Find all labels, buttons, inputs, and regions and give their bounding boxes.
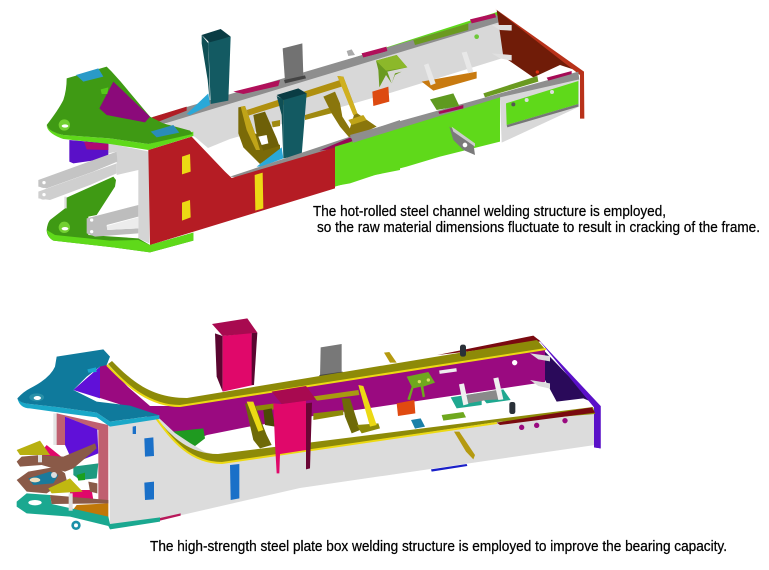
upper lug arms bbox=[38, 152, 117, 200]
upper clevis plate bbox=[47, 67, 193, 150]
near flange yellow edge bbox=[156, 418, 497, 463]
green gusset bbox=[173, 428, 205, 447]
box beam web bbox=[100, 349, 545, 442]
dark red near strip bbox=[497, 407, 595, 425]
diagonal lug bbox=[384, 352, 397, 363]
black pin near bbox=[509, 402, 515, 414]
purple rear strip redraw bbox=[594, 406, 601, 448]
purple inner plate bbox=[69, 140, 108, 163]
far flange yellow edge bbox=[107, 349, 546, 406]
holes bbox=[519, 418, 568, 430]
caption: steel plate box structure: The high-strength steel plate box welding structure is employed to improve the bearing capacity. bbox=[150, 538, 727, 555]
rear end plate bbox=[495, 9, 584, 119]
near flange bbox=[350, 72, 579, 143]
green bracket bbox=[376, 55, 407, 87]
interior frame bbox=[53, 413, 108, 518]
grey bracket bbox=[283, 43, 306, 83]
yellow patches bbox=[182, 154, 263, 221]
pink post rear bbox=[212, 318, 257, 392]
red web bbox=[148, 137, 335, 245]
blue patches bbox=[133, 426, 239, 500]
diagonal yellow lug bbox=[454, 432, 475, 459]
rear end plate bbox=[538, 339, 601, 448]
top teal plate bbox=[17, 349, 159, 427]
lower clevis plate bbox=[47, 177, 193, 252]
orange plate bbox=[372, 87, 389, 106]
fins bbox=[439, 353, 550, 389]
dark red far strip bbox=[437, 336, 541, 355]
olive and magenta strips bbox=[362, 13, 572, 114]
near pink post bbox=[272, 386, 316, 473]
green pad bbox=[442, 412, 466, 421]
far side green web panel placeholder bbox=[335, 127, 400, 187]
caption: hot-rolled structure: The hot-rolled steel channel welding structure is employed, bbox=[313, 203, 666, 220]
lower lug arms bbox=[87, 205, 138, 237]
far rail and web bbox=[153, 12, 503, 148]
yoke assembly bbox=[238, 76, 377, 164]
near teal post bbox=[257, 88, 307, 167]
near web bbox=[109, 408, 595, 528]
orange base bracket bbox=[422, 52, 477, 91]
orange plate bbox=[397, 400, 415, 416]
black pin bbox=[460, 345, 466, 357]
lug stack bbox=[17, 441, 108, 511]
grey inner end web bbox=[108, 143, 149, 243]
green bracket bbox=[407, 372, 435, 400]
magenta strip bbox=[319, 138, 355, 151]
lower teal plate bbox=[17, 493, 181, 530]
cyan pad bbox=[411, 418, 425, 429]
diagram: high-strength steel plate box frame bbox=[17, 318, 601, 530]
far bracket bbox=[319, 344, 343, 379]
green near web bbox=[335, 97, 500, 186]
bracket white ribs and base bbox=[451, 377, 511, 408]
caption: hot-rolled structure bbox=[313, 203, 760, 236]
far rail wear strips bbox=[152, 47, 387, 122]
near olive flange bbox=[155, 407, 595, 463]
diagram: hot-rolled steel channel frame bbox=[38, 9, 584, 252]
far olive flange bbox=[108, 340, 545, 406]
grey box reinforcement bbox=[500, 79, 579, 143]
blue strip bbox=[431, 464, 467, 472]
lug plate bbox=[449, 127, 475, 155]
far teal post bbox=[187, 29, 231, 115]
near flange stripe bbox=[230, 120, 400, 177]
green pad bbox=[430, 93, 459, 110]
far flange small bracket bbox=[347, 49, 355, 56]
yoke assembly bbox=[245, 385, 380, 448]
fins bbox=[474, 25, 512, 61]
